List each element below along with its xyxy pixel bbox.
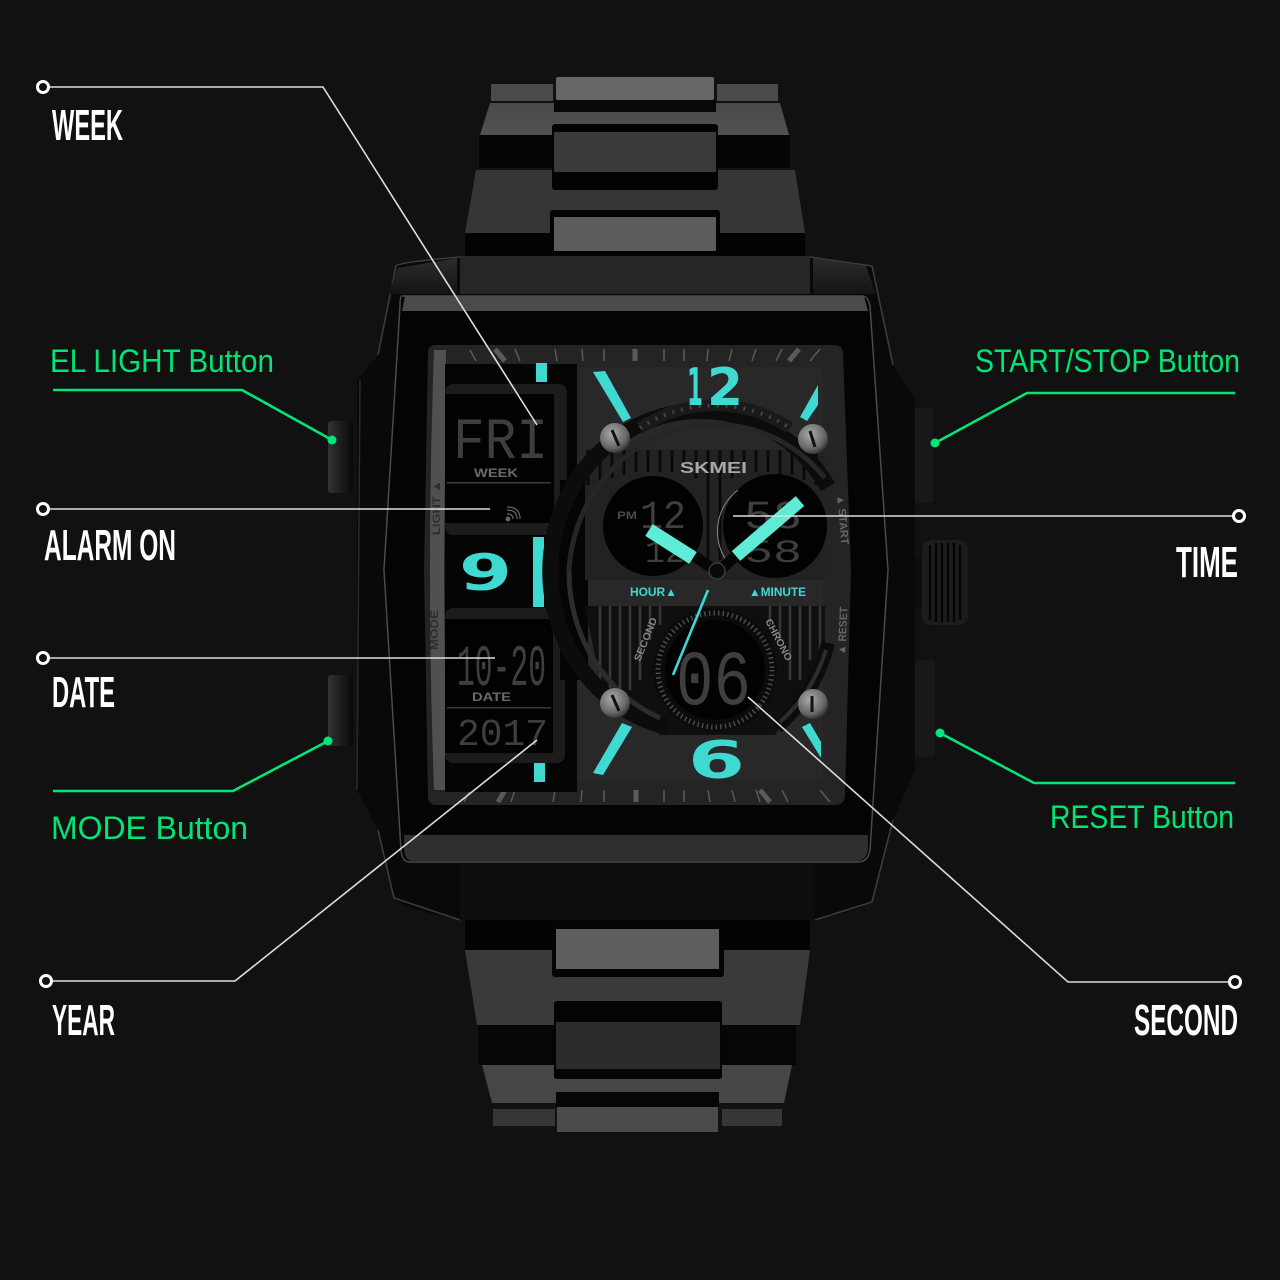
text: PM: PM <box>617 510 637 522</box>
text: FRI: FRI <box>453 411 548 476</box>
callout: YEAR <box>40 740 537 1045</box>
text: DATE: DATE <box>472 690 511 704</box>
display: date and year <box>445 608 565 763</box>
black gap behind ring <box>560 480 588 680</box>
dial rim <box>424 345 851 805</box>
left reflective strip <box>430 350 446 790</box>
rim ticks top <box>470 349 820 361</box>
subdial ring arcs <box>550 405 828 727</box>
numeral 9: 9 <box>459 544 512 602</box>
label: DATE: DATE <box>52 668 115 717</box>
text: CHRONO: CHRONO <box>762 617 794 663</box>
callout: TIME <box>733 510 1244 587</box>
text: SKMEI: SKMEI <box>680 460 747 477</box>
case <box>357 256 915 920</box>
label: WEEK: WEEK <box>52 101 123 150</box>
lug panel bottom <box>460 862 815 920</box>
text: HOUR: HOUR▲ <box>630 587 677 599</box>
stripes upper <box>585 450 825 580</box>
subdial: hour <box>603 476 703 576</box>
callout: RESET Button <box>936 728 1235 835</box>
display: week and alarm <box>445 384 567 535</box>
text: MINUTE: ▲MINUTE <box>749 587 806 599</box>
numeral 12: 1 <box>687 358 703 418</box>
button: start/stop <box>912 408 933 503</box>
callout: START/STOP Button <box>930 343 1240 448</box>
callout: EL LIGHT Button <box>50 343 336 444</box>
cyan index bars <box>533 363 547 782</box>
lug panel top <box>460 256 810 294</box>
top bezel band <box>402 296 868 311</box>
hands <box>649 501 800 675</box>
left digital displays <box>445 363 577 792</box>
cyan batons <box>593 371 821 775</box>
bottom strap <box>465 913 810 1132</box>
button: reset <box>912 660 935 757</box>
text: hour digits lower: 12 <box>645 535 685 572</box>
rim label MODE: MODE <box>429 610 441 650</box>
top strap <box>465 77 805 260</box>
analog dial panel <box>550 358 828 791</box>
rim label START: ▲ START <box>834 494 850 545</box>
text: hour digits: 12 <box>640 496 686 541</box>
crown <box>910 540 968 625</box>
screws <box>600 423 828 719</box>
text: 2017: 2017 <box>457 714 548 757</box>
button: EL light <box>328 421 353 493</box>
stripes lower <box>585 606 825 735</box>
minute hand <box>718 501 800 572</box>
icon: alarm waves <box>506 507 520 521</box>
numeral 12 <box>687 358 743 418</box>
text: 06: 06 <box>676 640 751 728</box>
watch <box>328 77 968 1132</box>
text: 10-20: 10-20 <box>457 638 546 703</box>
label: ALARM ON: ALARM ON <box>44 521 176 570</box>
label: START/STOP Button: START/STOP Button <box>975 343 1240 379</box>
text: SECOND: SECOND <box>633 616 660 663</box>
callout: MODE Button <box>51 736 332 846</box>
label: EL LIGHT Button: EL LIGHT Button <box>50 343 274 379</box>
rim ticks bottom <box>464 790 830 802</box>
hour hand <box>649 530 716 571</box>
bottom bezel band <box>404 835 868 861</box>
text: minute digits lower: 58 <box>744 535 802 572</box>
rim label RESET: ▲ RESET <box>836 606 851 655</box>
subdial: seconds <box>653 608 777 732</box>
text: minute digits: 58 <box>744 496 802 541</box>
hand hub <box>709 563 725 579</box>
callout: DATE <box>38 652 495 717</box>
label: MODE Button: MODE Button <box>51 810 248 846</box>
rim label LIGHT: LIGHT ▲ <box>431 480 443 535</box>
callout: ALARM ON <box>38 504 490 570</box>
text: WEEK: WEEK <box>474 466 518 480</box>
callout: SECOND <box>748 697 1240 1045</box>
button: mode <box>328 675 353 746</box>
label: RESET Button: RESET Button <box>1050 799 1234 835</box>
numeral 6: 6 <box>688 731 745 791</box>
callout: WEEK <box>38 82 537 425</box>
label: TIME: TIME <box>1176 538 1238 587</box>
second hand <box>673 590 708 675</box>
label: YEAR: YEAR <box>52 996 115 1045</box>
side buttons and crown <box>328 408 968 757</box>
subdial: minute <box>717 474 827 578</box>
numeral 12: 2 <box>707 358 743 418</box>
